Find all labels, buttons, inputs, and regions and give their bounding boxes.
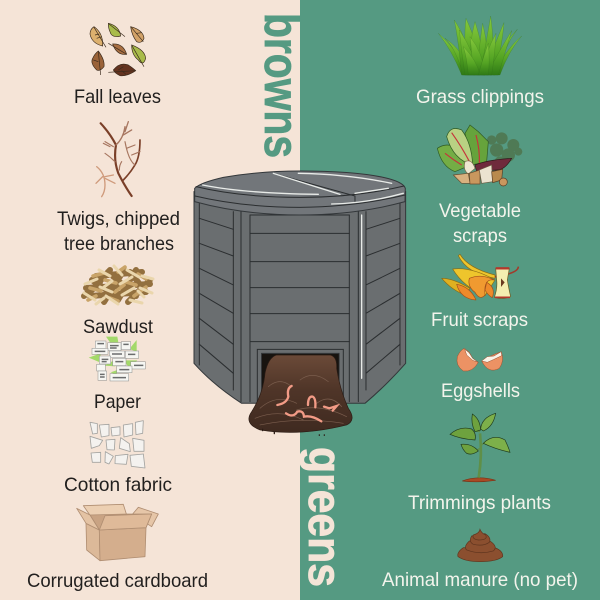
label: cotton fabric: Cotton fabric <box>64 474 172 496</box>
icon: cardboard box <box>77 504 158 561</box>
heading: browns: browns <box>254 13 307 158</box>
icon: sawdust <box>84 266 153 304</box>
icon: fruit scraps <box>442 254 518 300</box>
label: vegetable scraps: scraps <box>453 225 507 247</box>
illustration: compost bin <box>194 171 406 435</box>
compost texture <box>255 375 347 425</box>
icon: twigs <box>96 122 140 197</box>
label: twigs: tree branches <box>64 233 174 255</box>
icon: animal manure <box>458 529 503 562</box>
bin vertical columns <box>199 198 400 402</box>
label: eggshells: Eggshells <box>441 380 520 402</box>
compost crumbs <box>263 429 324 435</box>
panel: browns background <box>0 0 300 600</box>
bin lid <box>195 171 405 215</box>
label: fall leaves: Fall leaves <box>74 86 161 108</box>
icon: vegetable scraps <box>437 125 522 186</box>
icon: paper <box>89 337 145 381</box>
icon: cotton fabric <box>90 421 145 468</box>
door frame <box>257 349 343 402</box>
label: sawdust: Sawdust <box>83 316 154 338</box>
worms <box>277 386 337 421</box>
heading: greens: greens <box>299 447 351 587</box>
label: corrugated cardboard: Corrugated cardboard <box>27 570 208 592</box>
label: vegetable scraps <box>439 200 521 247</box>
label: vegetable scraps: Vegetable <box>439 200 521 222</box>
icon: grass <box>438 16 522 75</box>
bin body <box>194 192 406 403</box>
lid highlights <box>203 173 403 378</box>
label: animal manure: Animal manure (no pet) <box>382 569 578 591</box>
label: twigs <box>57 208 180 255</box>
icon: fall leaves <box>90 23 146 76</box>
compost pile <box>249 355 352 432</box>
label: fruit scraps: Fruit scraps <box>431 309 528 331</box>
label: paper: Paper <box>94 391 141 413</box>
door opening <box>262 354 339 397</box>
panel: greens background <box>300 0 600 600</box>
icon: eggshells <box>457 348 503 371</box>
label: trimmings plants: Trimmings plants <box>408 492 551 514</box>
lid rim lines <box>195 173 405 207</box>
label: grass clippings: Grass clippings <box>416 86 544 108</box>
label: twigs: Twigs, chipped <box>57 208 180 230</box>
icon: plant <box>450 413 510 482</box>
parsley <box>487 132 522 167</box>
